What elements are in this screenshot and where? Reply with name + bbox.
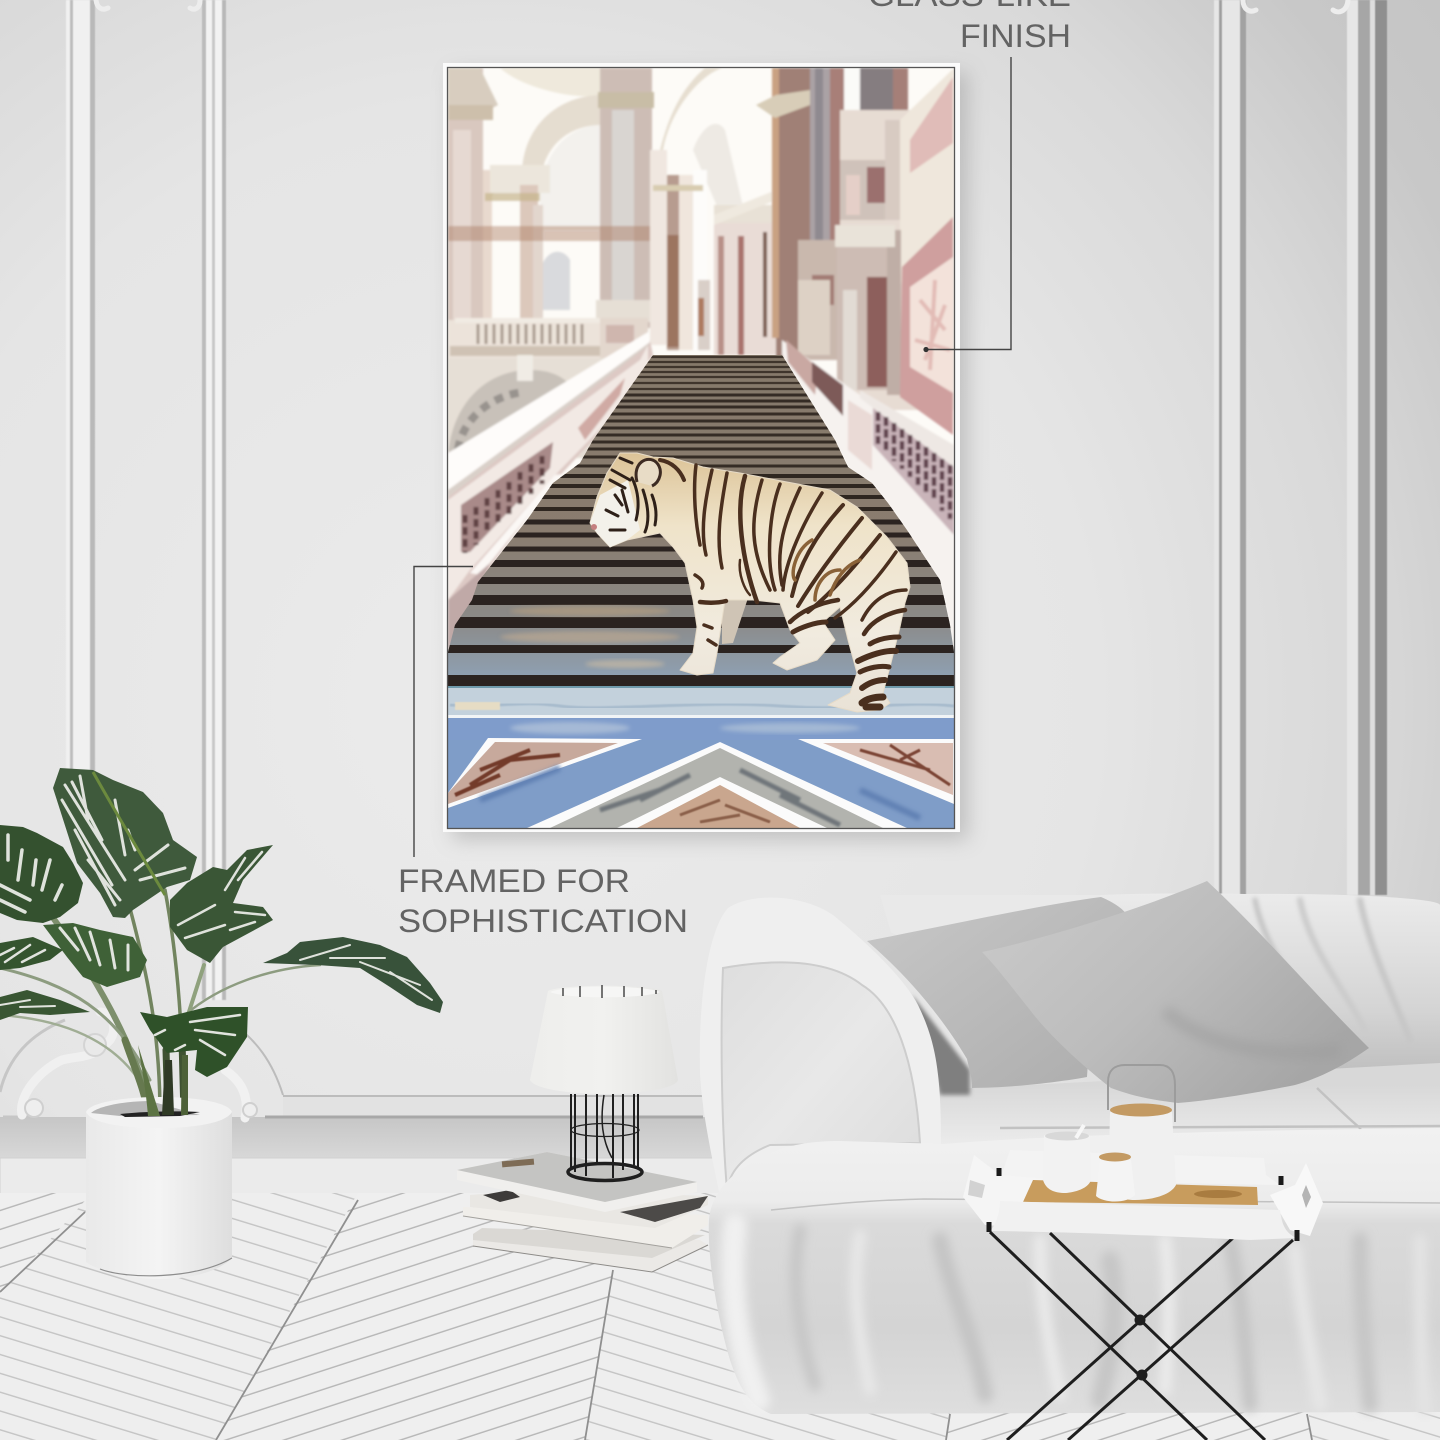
lower wall panel moulding and scrolls (0, 0, 1348, 1118)
vaulted arches (500, 68, 745, 310)
callout: framed for sophistication: SOPHISTICATION (398, 903, 688, 939)
white tiger (590, 453, 910, 712)
balcony (448, 318, 648, 360)
callout: framed for sophistication (398, 566, 688, 939)
tiger body (590, 453, 910, 712)
back left cushion (880, 895, 1150, 1000)
tray (1000, 1150, 1280, 1185)
white frame (443, 63, 960, 832)
face stripes (606, 458, 656, 532)
stems (0, 890, 320, 1115)
callout: glass-like finish: FINISH (960, 18, 1071, 54)
large jar (1108, 1112, 1176, 1200)
leaf left upper (0, 825, 83, 923)
palace architecture (448, 68, 954, 652)
table lamp on books (457, 985, 708, 1272)
tray front (990, 1201, 1296, 1240)
leader line (414, 566, 473, 857)
wood board (1023, 1180, 1258, 1205)
lamp cage (568, 1094, 642, 1180)
central column (596, 68, 707, 350)
right balustrade (782, 340, 954, 652)
left arm (700, 898, 941, 1210)
pillow right (982, 881, 1369, 1103)
back cushion folds (1255, 900, 1410, 1040)
leaf bottom center (140, 1007, 248, 1077)
leaf middle left (43, 923, 147, 987)
tray clips (989, 1168, 1297, 1241)
table legs (990, 1232, 1293, 1440)
baseboard (0, 1158, 720, 1194)
book stack (457, 1152, 708, 1272)
tray table (963, 1065, 1323, 1440)
jar handle (1108, 1065, 1175, 1122)
pillow shading (1165, 1010, 1340, 1053)
seat cushions (935, 1063, 1440, 1150)
arm face (722, 962, 920, 1190)
face white (590, 480, 640, 547)
nose (591, 524, 597, 530)
painting: palace staircase with white tiger (440, 68, 960, 828)
herringbone floor (0, 1193, 1440, 1440)
callout: glass-like finish (868, 0, 1071, 352)
pillow left (867, 897, 1128, 1088)
sofa (700, 881, 1440, 1414)
leaf long right (263, 937, 443, 1013)
ear (636, 459, 660, 486)
wall mouldings (66, 0, 1387, 1000)
far front leg (722, 598, 748, 644)
back right cushion (1100, 893, 1440, 1090)
framed artwork (440, 63, 960, 832)
dark gap shadow (912, 995, 970, 1095)
small jar (1096, 1160, 1135, 1202)
label: FRAMED FOR (398, 863, 630, 899)
small jar lid (1099, 1152, 1131, 1162)
painting inner border (448, 68, 954, 828)
lamp shade (530, 986, 678, 1094)
leader line (926, 57, 1011, 350)
cup (1043, 1133, 1091, 1193)
brown reflection band (448, 226, 650, 241)
marble floor (448, 686, 954, 828)
arch under balcony (448, 355, 608, 458)
left columns (448, 68, 550, 338)
potted plant (0, 768, 443, 1279)
leaf lower left (0, 990, 90, 1020)
front seam (771, 1199, 1440, 1210)
left balustrade (448, 332, 653, 652)
front cushion and base (709, 1128, 1440, 1414)
pot (86, 1112, 232, 1279)
right pink columns (756, 68, 908, 360)
body stripes (660, 460, 906, 707)
staircase (440, 355, 960, 686)
framed artwork shadow (452, 72, 968, 840)
leaf right center (170, 845, 273, 963)
right marble wall (835, 68, 954, 435)
fabric folds (733, 1225, 1425, 1410)
leaf left (0, 937, 63, 970)
jar lid (1110, 1104, 1172, 1116)
leaf top (53, 768, 197, 918)
far right corridor (698, 190, 776, 355)
